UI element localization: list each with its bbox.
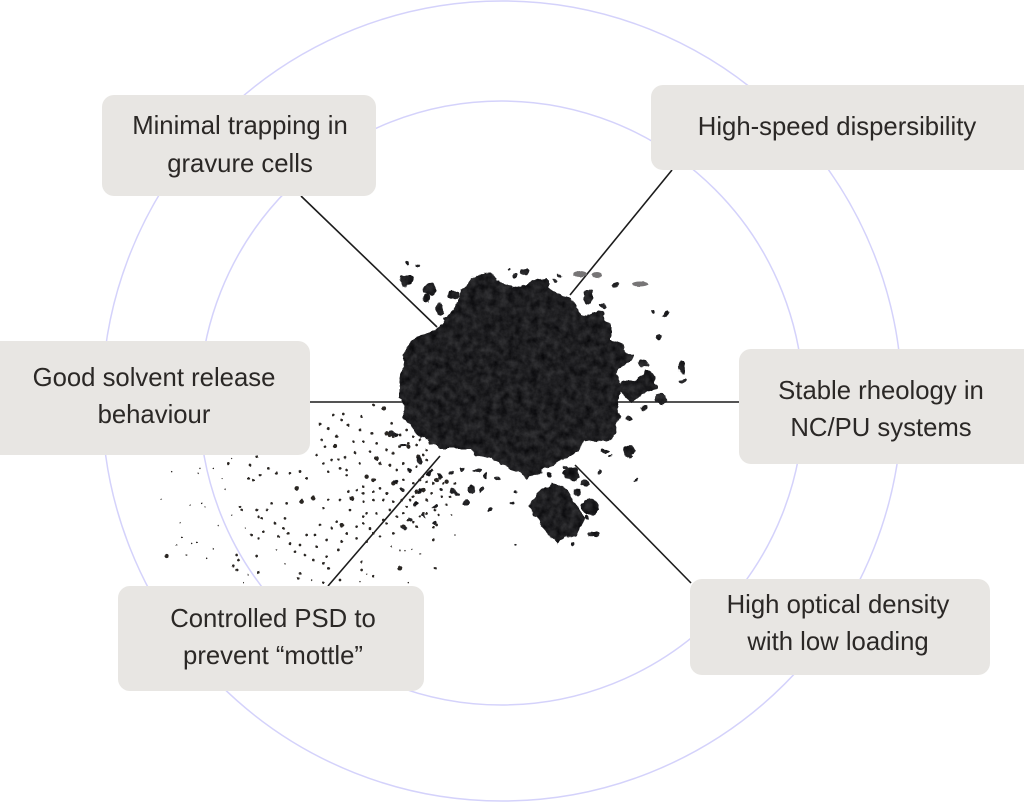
large lump and loose chunks <box>390 260 685 546</box>
box: good solvent release: behaviour <box>98 401 211 429</box>
box: minimal trapping: gravure cells <box>167 150 313 178</box>
box: minimal trapping <box>102 95 376 196</box>
faded dust <box>573 271 648 286</box>
box: good solvent release: Good solvent release <box>33 364 275 392</box>
box: stable rheology: Stable rheology in <box>778 377 984 405</box>
connector lines <box>301 170 739 586</box>
powder pile <box>161 260 685 583</box>
box: stable rheology: NC/PU systems <box>790 414 972 442</box>
box: high-speed dispersibility <box>651 85 1024 170</box>
box: high optical density: High optical density <box>727 591 950 619</box>
box: high-speed dispersibility: High-speed dispersibility <box>698 113 976 141</box>
box: high optical density <box>690 579 990 675</box>
box: minimal trapping: Minimal trapping in <box>132 112 348 140</box>
box: controlled PSD: Controlled PSD to <box>170 605 376 633</box>
scattered specks <box>161 405 455 583</box>
box: good solvent release <box>0 341 310 455</box>
concentric circles <box>102 1 902 801</box>
box: stable rheology <box>739 349 1024 464</box>
main heap <box>400 272 657 482</box>
box: controlled PSD: prevent “mottle” <box>183 642 363 670</box>
box: high optical density: with low loading <box>746 628 929 656</box>
box: controlled PSD <box>118 586 424 691</box>
